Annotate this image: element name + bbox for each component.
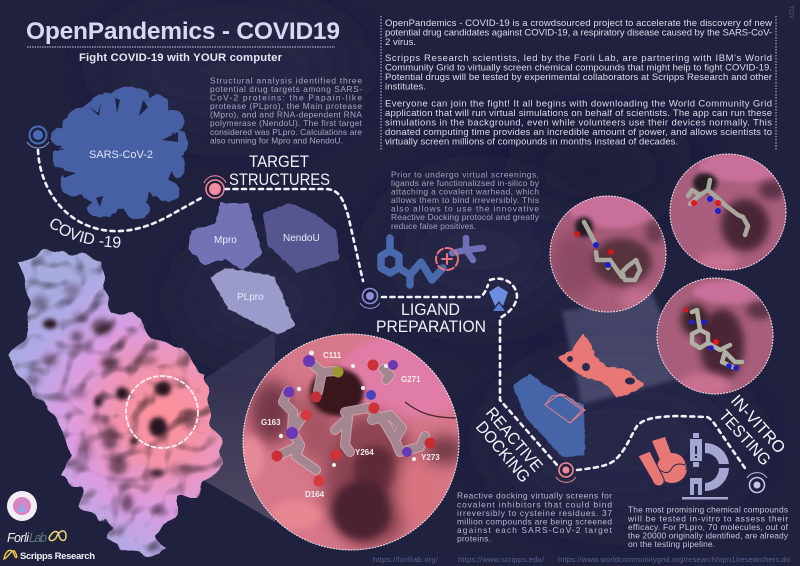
small corner mark: TOY — [787, 5, 794, 20]
residue labels: Y264 — [355, 448, 374, 457]
label: reactive docking: DOCKING — [472, 418, 533, 486]
logo: Forli Lab: Forli — [7, 531, 30, 545]
ligand 2 atoms — [691, 196, 721, 214]
target structures text: polymerase (NendoU). The first target — [210, 118, 363, 128]
ligand preparation text: Reactive Docking protocol and greatly — [391, 212, 540, 222]
intro text block: potential drug candidates against COVID-19, a respiratory disease caused by the SARS-CoV- — [385, 28, 772, 38]
intro text block: Community Grid to virtually screen chemical compounds that might help to fight COVID-19. — [385, 62, 772, 74]
node: in-vitro testing — [747, 473, 767, 492]
icon: microscope — [682, 433, 729, 500]
title divider — [27, 46, 335, 48]
target structures text: CoV-2 proteins: the Papain-like — [210, 92, 362, 102]
in-vitro testing text: the 20000 originally identified, are already — [628, 530, 789, 540]
url links: https://forlilab.org/ — [373, 555, 439, 564]
protein: PLpro — [213, 270, 293, 332]
logo: Forli Lab: Lab — [29, 531, 47, 545]
logo: consortium seal — [7, 491, 37, 521]
large protein surface — [7, 250, 222, 553]
ligand 3 atoms — [684, 308, 739, 371]
ligand 2 sticks — [688, 180, 748, 235]
target structures text: potential drug targets among SARS- — [210, 84, 362, 94]
intro text block: institutes. — [385, 82, 426, 92]
in-vitro testing text: efficacy. For PLpro, 70 molecules, out of — [628, 522, 789, 532]
label: target structures: TARGET — [249, 152, 309, 171]
node: ligand preparation — [360, 288, 380, 308]
ligand preparation text: ligands are functionalizsed in-silico by — [391, 178, 540, 188]
intro text block: application that will run virtual simulations on behalf of scientists. The app can run these — [385, 108, 772, 119]
curve for COVID-19 label — [48, 225, 126, 248]
in-vitro testing text: The most promising chemical compounds — [628, 505, 788, 515]
in-vitro testing text: will be tested in-vitro to assess their — [627, 513, 788, 523]
residues outline — [278, 362, 425, 470]
icon: flask and test tube — [638, 437, 687, 486]
ligand 1 sticks — [584, 222, 640, 280]
virus SARS-CoV-2 — [51, 87, 188, 219]
protein: Mpro — [190, 205, 260, 268]
residue labels: Y273 — [421, 453, 440, 462]
ligand docking circle 1 — [550, 188, 666, 312]
ligand preparation text: Prior to undergo virtual screenings, — [391, 169, 539, 179]
reactive docking text: covalent inhibitors that could bind — [457, 499, 612, 509]
ligand docking circle 3 — [657, 278, 777, 397]
residues sticks — [278, 362, 425, 470]
reactive docking text: million compounds are being screened — [457, 516, 612, 526]
ligand preparation text: reduce false positives. — [391, 221, 476, 231]
label: ligand preparation: PREPARATION — [376, 317, 486, 336]
protein: NendoU — [265, 205, 337, 270]
residue labels: D164 — [305, 490, 325, 499]
reactive docking text: against each SARS-CoV-2 target — [457, 525, 613, 535]
intro text block: Scripps Research scientists, led by the Forli Lab, are partnering with IBM's World — [385, 53, 772, 64]
label: in-vitro testing: TESTING — [715, 407, 774, 469]
logo: Scripps Research: Scripps Research — [20, 551, 95, 562]
residue labels: C111 — [323, 351, 342, 360]
residue labels: G271 — [401, 375, 421, 384]
virus label: SARS-CoV-2 — [89, 149, 153, 161]
node: reactive docking — [556, 463, 576, 482]
node: COVID-19 — [27, 126, 49, 148]
logo: Forli Lab — [7, 531, 66, 545]
target structures text: also running for Mpro and NendoU. — [210, 135, 343, 145]
label: in-vitro testing: IN-VITRO — [727, 392, 789, 457]
reactive docking text: proteins. — [457, 534, 491, 544]
label: ligand preparation — [376, 300, 486, 336]
protein: NendoU: NendoU — [283, 233, 320, 244]
target structures text — [210, 75, 363, 145]
reactive docking text — [457, 491, 613, 544]
label: COVID-19: COVID -19 — [50, 218, 120, 248]
label: target structures — [229, 152, 330, 189]
title: OpenPandemics - COVID19 — [26, 18, 340, 45]
label: target structures: STRUCTURES — [229, 170, 330, 189]
icon: ligand node pentagon — [489, 286, 508, 311]
in-vitro testing text: on the testing pipeline. — [628, 539, 715, 549]
target structures text: Structural analysis identified three — [210, 75, 362, 85]
ligand preparation text — [391, 169, 540, 231]
reactive docking text: irreversibly to cysteine residues. 37 — [457, 508, 612, 518]
ligand preparation text: attaching a covalent warhead, which — [391, 186, 539, 196]
ligand preparation text: allows them to bind irreversibly. This — [391, 195, 539, 205]
reactive docking text: Reactive docking virtually screens for — [457, 491, 612, 501]
intro text block: virtually screen millions of compounds in months instead of decades. — [385, 136, 678, 148]
intro text block: Potential drugs will be tested by experimental collaborators at Scripps Research and other — [385, 72, 772, 83]
intro text block: simulations in the background, even while volunteers use their devices normally. This — [385, 118, 772, 128]
ligand docking circle 2 — [669, 152, 791, 272]
residue labels: G163 — [261, 418, 281, 427]
node: target structures — [204, 176, 226, 198]
dashed pipeline path — [38, 150, 747, 471]
zoom marker on protein — [126, 376, 198, 448]
surface cavities and shading — [26, 284, 197, 516]
target structures text: protease (PLpro), the Main protease — [210, 101, 362, 111]
label: reactive docking: REACTIVE — [482, 404, 546, 475]
intro text block — [381, 16, 776, 151]
ligand preparation text: also allows to use the innovative — [391, 204, 539, 214]
intro text block: donated computing time provides an incredible amount of power, and allows scientists to — [385, 127, 772, 138]
in-vitro testing text — [627, 505, 789, 549]
protein: Mpro: Mpro — [214, 235, 237, 246]
icon: ligand molecule with warhead — [381, 238, 483, 285]
intro text block: Everyone can join the fight! It all begins with downloading the World Community Grid — [385, 98, 772, 110]
residue labels — [261, 351, 440, 499]
subtitle: Fight COVID-19 with YOUR computer — [79, 52, 283, 64]
target structures text: considered was PLpro. Calculations are — [210, 127, 362, 137]
protein: PLpro: PLpro — [237, 292, 264, 303]
url links: https://www.worldcommunitygrid.org/research/opn1/researchers.do — [558, 555, 790, 564]
residue atoms — [272, 350, 436, 486]
icon: docked ligand — [560, 336, 642, 396]
intro text block: 2 virus. — [385, 37, 416, 48]
intro text block: OpenPandemics - COVID-19 is a crowdsourced project to accelerate the discovery of new — [385, 18, 772, 29]
url links: https://www.scripps.edu/ — [458, 555, 545, 564]
icon: receptor with box — [515, 376, 585, 455]
label: ligand preparation: LIGAND — [401, 300, 460, 319]
target structures text: (Mpro), and and RNA-dependent RNA — [210, 110, 362, 120]
ligand 1 atoms — [574, 231, 614, 268]
big binding site circle — [242, 334, 460, 550]
url links — [373, 555, 790, 564]
ligand 3 sticks — [692, 310, 742, 368]
